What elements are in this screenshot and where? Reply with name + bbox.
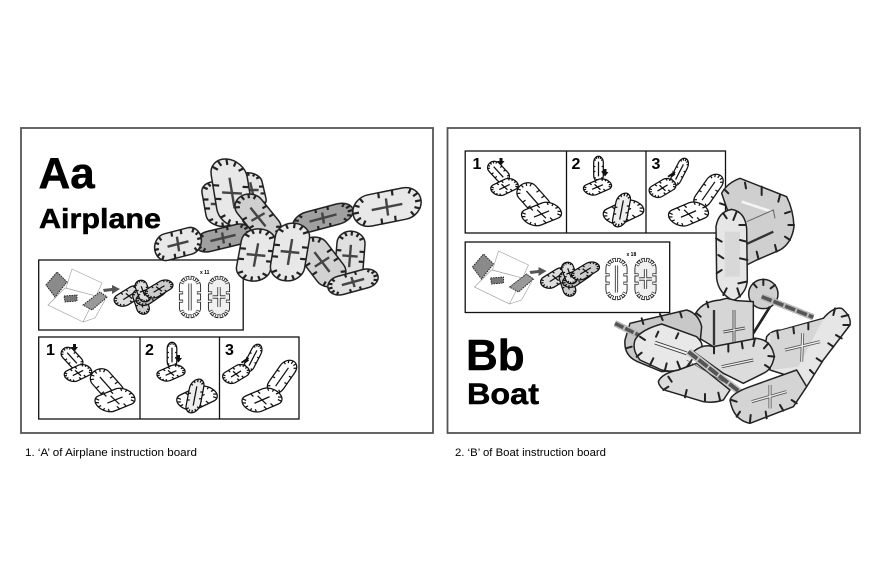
heading: Boat: Boat — [467, 378, 539, 411]
panel: parts box boat — [465, 242, 670, 312]
lower left hull — [658, 363, 730, 402]
label: x 18: x 18 — [626, 252, 636, 258]
panel: airplane board — [21, 128, 433, 433]
centre upright — [694, 298, 753, 347]
step number 1: 1 — [46, 342, 55, 359]
back roundel and beam — [749, 279, 813, 333]
panel: boat board — [448, 128, 860, 433]
middle front hull — [693, 338, 774, 383]
front beam — [687, 352, 750, 400]
panel: assembly steps boat — [465, 151, 727, 233]
step number 3: 3 — [225, 342, 234, 359]
rear left hull — [615, 310, 702, 372]
caption: airplane: 1. ‘A’ of Airplane instruction board — [25, 447, 197, 459]
step number 3 boat: 3 — [652, 156, 660, 173]
sail — [720, 178, 794, 265]
step number 2 boat: 2 — [572, 156, 580, 173]
illustration: airplane model — [153, 158, 423, 298]
heading: Airplane: Airplane — [39, 203, 161, 234]
caption: boat: 2. ‘B’ of Boat instruction board — [455, 447, 606, 459]
step number 1 boat: 1 — [472, 156, 482, 173]
left hull — [634, 324, 702, 371]
heading: Bb: Bb — [466, 331, 525, 380]
panel: assembly steps airplane — [39, 337, 300, 419]
mast — [716, 209, 747, 301]
panel: parts box airplane — [39, 260, 243, 330]
illustration: boat model — [615, 178, 850, 423]
right hull with fin — [763, 308, 850, 387]
front hull — [730, 370, 807, 423]
heading: Aa: Aa — [38, 149, 95, 198]
step number 2: 2 — [145, 342, 154, 359]
label: x 11: x 11 — [200, 270, 210, 276]
